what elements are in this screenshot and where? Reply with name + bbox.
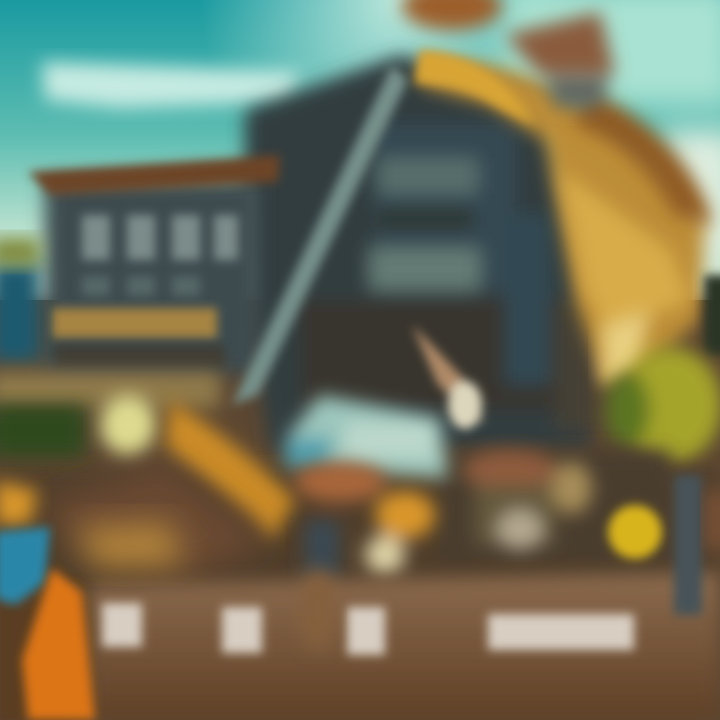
orange blob [22,568,95,720]
cyan central structure [285,395,448,478]
tree right [606,347,720,463]
left edge building [0,262,40,362]
brown pavilion [40,465,270,575]
left foreground objects [0,480,185,720]
white ground signs [102,603,634,655]
orange curved slide [165,400,296,540]
yellow balcony band [52,308,217,338]
lamp post right [674,475,702,615]
central market stalls [294,450,592,580]
left building [28,155,280,375]
glowing yellow light [100,395,156,455]
green hedge [0,405,85,457]
dark edge behind the tree [704,275,720,355]
mid band behind the plaza [0,372,720,590]
yellow curved building [415,50,712,385]
blue blob [0,527,50,605]
diagonal light band [232,65,408,405]
raised arm and white figure [412,325,485,429]
central building [245,55,600,450]
ground [90,572,720,720]
figure on the plaza [300,568,336,652]
roof top ornaments [402,0,615,108]
white cloud band [42,62,300,108]
roof [28,155,280,195]
yellow flowers right [608,505,662,559]
